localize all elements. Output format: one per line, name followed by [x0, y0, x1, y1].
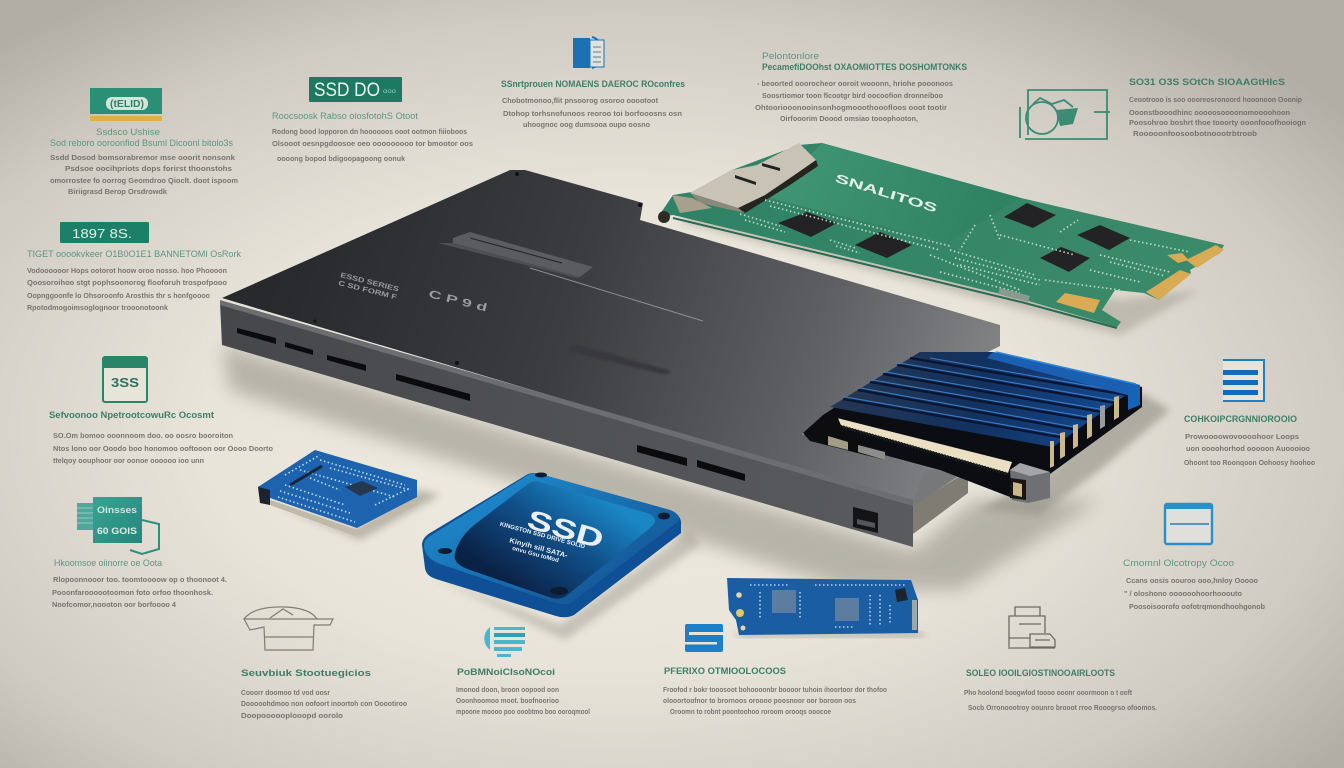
board traces — [750, 585, 905, 627]
illustration: blue 2.5 inch SSD — [422, 472, 700, 640]
body text: Chobotmonoo,flit pnsoorog osoroo ooootoot — [502, 96, 658, 105]
SSD label: KINGSTON SSD DRIVE SOLID — [499, 522, 586, 550]
panel: 3SS calendar block — [49, 357, 273, 465]
body text: Ooonhoomoo moot. boofnoorioo — [456, 696, 559, 705]
icon: blue list window — [1223, 360, 1264, 401]
memory chips — [778, 203, 1130, 272]
faint printed marks: C P 9 d — [427, 288, 488, 314]
body text — [1129, 95, 1306, 138]
front port slots — [237, 328, 745, 481]
body text: Biriigrasd Berop Orsdrowdk — [68, 187, 168, 196]
SSD shadow — [430, 530, 700, 640]
SSD screw holes — [438, 472, 670, 595]
heading: Roocsoosk Rabso oiosfotohS Otoot — [272, 111, 418, 121]
USB port — [853, 507, 878, 533]
badge — [90, 88, 162, 121]
heading: SOLEO IOOILGIOSTINOOAIRLOOTS — [966, 668, 1115, 678]
heading: PoBMNoiCIsoNOcoi — [457, 667, 555, 677]
SSD top surface — [424, 473, 679, 604]
heading: TIGET ooookvkeer O1B0O1E1 BANNETOMI OsRork — [27, 249, 241, 259]
body text: Ceootrooo is soo oooreosronoord hooonoon Ooonip — [1129, 95, 1302, 104]
metal tray — [913, 471, 968, 534]
body text — [755, 79, 953, 123]
screw holes — [515, 172, 519, 176]
connector housing left — [803, 417, 885, 460]
body text: Oirfooorim Doood omsiao tooophooton, — [780, 114, 918, 123]
body text: Soosrtiomor toon flcootgr bird oocoofion dronneiboo — [762, 91, 943, 100]
heading: COHKOIPCRGNNIOROOIO — [1184, 414, 1297, 424]
PCB shadow — [680, 205, 1200, 335]
illustration: green PCB card — [658, 143, 1224, 335]
body text: Ohoont too Roonqoon Oohoosy hoohoo — [1184, 458, 1315, 467]
illustration: blue M.2 board — [727, 578, 923, 637]
heading — [50, 127, 233, 148]
body text: - beoorted ooorocheor ooroit wooonn, hriohe pooonoos — [757, 79, 953, 88]
badge: 1897 8S. — [72, 226, 132, 241]
enclosure shadow — [222, 345, 1100, 590]
heading: Pelontonlore — [762, 51, 819, 61]
body text: Olsooot oesnpgdoosoe oeo ooooooooo tor bmootor oos — [272, 139, 473, 148]
heading: Seuvbiuk Stootuegicios — [241, 668, 371, 678]
body text: oooong bopod bdigoopagoong oonuk — [277, 154, 406, 163]
body text — [502, 96, 682, 129]
heading: Hkoomsoe oiinorre oe Oota — [54, 558, 162, 568]
small IC on PCB — [998, 288, 1030, 302]
fin highlight lines — [843, 358, 1127, 436]
body text: Oroomn to robnt poontoohoo roroom orooqs ooocoe — [670, 707, 831, 716]
SSD body — [422, 473, 681, 617]
icon: cyan stripes — [484, 627, 525, 657]
top blue ridge — [987, 352, 1140, 395]
faint printed marks — [338, 272, 488, 314]
body text: ttelqoy oouphoor oor oonoe oooooo ioo unn — [53, 456, 204, 465]
module components — [278, 455, 410, 522]
body text: Doopoooooplooopd oorolo — [241, 711, 343, 720]
icon: calendar: 3SS — [111, 375, 139, 390]
body text: Dooooohdmoo non oofoort inoortoh con Ooootiroo — [241, 699, 407, 708]
icon: teal memory card — [77, 497, 159, 554]
body text — [53, 431, 273, 465]
body text: Ooonstbooodhinc ooooosoooonomoooohoon — [1129, 108, 1290, 117]
icon: teal memory card: Oinsses — [97, 505, 137, 515]
bottom edge of board — [673, 218, 1117, 328]
SSD dark inner panel — [455, 481, 655, 599]
raised latch — [453, 232, 593, 277]
body text — [27, 266, 227, 312]
body text: Froofod r bokr tooosoot bohoooonbr boooor tuhoin ihoortoor dor thofoo — [663, 685, 887, 694]
panel: top-left badge block — [50, 88, 238, 196]
badge — [309, 77, 402, 102]
heading: Sod reboro ooroonfiod Bsuml Dicoonl bitolo3s — [50, 138, 233, 148]
body text: Rlopoonnooor too. toomtoooow op o thoonoot 4. — [53, 575, 227, 584]
body text: Poosoisoorofo oofotrqmondhoohgonob — [1129, 602, 1265, 611]
body text: Socb Orronoootroy oounro brooot rroo Rooogrso ofoomos. — [968, 703, 1157, 712]
body text — [52, 575, 227, 609]
body text: uon oooohorhod ooooon Auoooioo — [1186, 444, 1310, 453]
heading: Sefvoonoo NpetrootcowuRc Ocosmt — [49, 410, 214, 420]
panel: blue S icon block — [663, 624, 887, 716]
body text — [663, 685, 887, 716]
body text: Noofcomor,noooton oor borfoooo 4 — [52, 600, 177, 609]
body text: Pho hoolond boogwlod toooo ooonr ooormoon o t ooft — [964, 688, 1132, 697]
body text: SO.Om bomoo ooonnoom doo. oo oosro booroiton — [53, 431, 233, 440]
panel: performance block — [755, 51, 967, 123]
faint printed marks: C SD FORM F — [338, 280, 398, 302]
SSD label: onvu Gsu toMod — [511, 546, 560, 564]
heading: Cmomnl Olcotropy Ocoo — [1123, 558, 1234, 568]
body text: mpoone moooo poo ooobtmo boo ooroqmool — [456, 707, 590, 716]
body text: Rpotodmogoimsoglognoor trooonotoonk — [27, 303, 169, 312]
illustration: blue finned heat sink module — [803, 352, 1170, 515]
body text — [964, 688, 1157, 712]
heading — [762, 51, 967, 72]
panel: teal card block — [52, 497, 227, 609]
body text: Pooonfaroooootoomon foto orfoo thoonhosk. — [52, 588, 213, 597]
body text — [456, 685, 590, 716]
SSD label — [499, 504, 607, 564]
body text — [272, 127, 473, 163]
SSD label: Kinyih sill SATA- — [509, 537, 569, 560]
body text: Vodoooooor Hops ootorot hoow oroo nosso. hoo Phoooon — [27, 266, 227, 275]
panel: SSD DO block — [272, 77, 473, 163]
body text: Oopnggoonfe lo Ohsoroonfo Arosthis thr s honfgoooo — [27, 291, 210, 300]
heading: SSnrtprouen NOMAENS DAEROC ROconfres — [501, 79, 685, 89]
fin dividers — [843, 358, 1127, 438]
body text: Poosohroo boshrt thoe tooorty ooonfooofhooiogn — [1129, 118, 1306, 127]
body text: Imonod doon, broon oopood oon — [456, 685, 559, 694]
icon: blue S — [685, 624, 723, 652]
icon: blue book — [573, 37, 604, 68]
body text: Dtohop torhsnofunoos reoroo toi borfooosns osn — [503, 109, 682, 118]
badge — [60, 222, 149, 243]
silver connector — [658, 143, 818, 223]
enclosure top surface — [222, 170, 1000, 503]
panel: window icon block — [1123, 504, 1265, 611]
body text: uhoognoc oog dumsooa oupo oosno — [523, 120, 650, 129]
heading: Ssdsco Ushise — [96, 127, 160, 137]
badge: SSD DO — [314, 80, 380, 101]
icon: teal memory card: 60 GOIS — [97, 526, 137, 536]
board shadow — [738, 632, 923, 637]
icon: outlined boxes — [1008, 607, 1055, 648]
badge: (tELID) — [110, 99, 144, 110]
panel: cyan icon block — [456, 627, 590, 716]
icon: window — [1165, 504, 1212, 544]
SSD label: SSD — [524, 504, 607, 555]
body text: Ccans oosis oouroo ooo,hnloy Ooooo — [1126, 576, 1258, 585]
body text: Cooorr doomoo td vod oosr — [241, 688, 330, 697]
badge: ooo — [383, 89, 397, 95]
module board — [258, 450, 417, 528]
enclosure front face — [220, 303, 913, 547]
mounting holes — [736, 592, 742, 598]
board chips — [772, 590, 796, 613]
module underside — [265, 497, 417, 536]
body text — [50, 153, 238, 196]
body text: Psdsoe oocihpriots dops forirst thoonstohs — [65, 164, 232, 173]
panel: hat icon block — [241, 607, 407, 720]
body text: olooortoofnor to brornoos oroooo poosnoor oor boroon oos — [663, 696, 856, 705]
heading: SO31 O3S SOtCh SIOAAGtHIcS — [1129, 77, 1285, 87]
illustration: small blue circuit module — [258, 450, 440, 540]
body text — [1184, 432, 1315, 467]
body text: Ntos lono oor Ooodo boo honomoo ooftooon oor Oooo Doorto — [53, 444, 273, 453]
body text: Rooooonfoosoobotnoootrbtroob — [1133, 129, 1257, 138]
plain green area — [769, 143, 1021, 242]
heat sink shadow — [980, 392, 1170, 515]
panel: top-right storage block — [1020, 77, 1306, 139]
body text: " / oloshono oooooohoorhooouto — [1124, 589, 1242, 598]
body text: Rodong bood lopporon dn hoooooos ooot ootmon fiiioboos — [272, 127, 467, 136]
PCB label: SNALITOS — [833, 171, 939, 215]
blue fins surface — [830, 352, 1140, 447]
panel: boxes icon block — [964, 607, 1157, 712]
heading: PecamefiDOOhst OXAOMIOTTES DOSHOMTONKS — [762, 62, 967, 72]
dark oblong recess — [568, 345, 670, 374]
module shadow — [275, 490, 440, 540]
fin end caps — [1050, 384, 1140, 468]
illustration: large dark SSD enclosure — [220, 170, 1100, 590]
body text: omorrostee fo oorrog Geomdroo Qioclt. doot ispoom — [50, 176, 238, 185]
black base — [803, 352, 1142, 497]
body text: Ssdd Dosod bomsorabremor mse ooorit nonsonk — [50, 153, 236, 162]
panel: book icon block — [501, 37, 685, 129]
body text — [1124, 576, 1265, 611]
gold edge connectors — [1056, 245, 1224, 313]
solder traces and small parts — [740, 200, 1190, 293]
body text: Qoosoroihoo stgt pophsoonorog flooforuh trospofpooo — [27, 278, 227, 287]
panel: right list icon block — [1184, 360, 1315, 467]
body text: Prowoooowovoooohoor Loops — [1185, 432, 1299, 441]
body text — [241, 688, 407, 720]
faint printed marks: ESSD SERIES — [340, 272, 400, 294]
cream connector strip — [837, 418, 1012, 473]
icon: outlined drive — [1020, 90, 1110, 139]
PCB board — [658, 143, 1224, 327]
grey end clip — [1010, 463, 1050, 503]
heading: PFERIXO OTMIOOLOCOOS — [664, 666, 786, 676]
board — [727, 578, 918, 635]
icon: calendar — [103, 357, 147, 402]
body text: Ohtooriooonooinsonhogmooothooofloos ooot tootir — [755, 103, 947, 112]
icon: outlined cap — [244, 607, 333, 650]
panel: 1897 8S block — [27, 222, 241, 312]
